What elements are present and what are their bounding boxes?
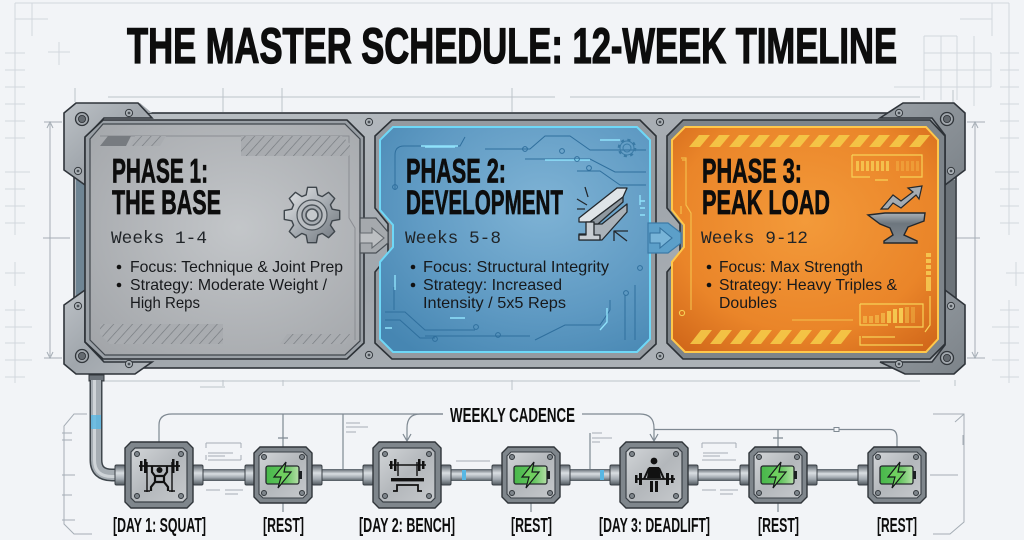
- bullet list phase 3: Focus: Max Strength: [719, 259, 863, 276]
- label: rest 2: [REST]: [511, 515, 552, 537]
- bullet list phase 3: [707, 259, 897, 312]
- label: day 3 deadlift: [DAY 3: DEADLIFT]: [599, 515, 710, 537]
- label: rest 3: [REST]: [758, 515, 799, 537]
- icon: rising arrow: [881, 186, 922, 209]
- corner bracket bottom-right: [880, 290, 965, 374]
- node: rest 4: [868, 447, 926, 503]
- node: day 1 squat: [125, 442, 193, 508]
- heading: phase 1: PHASE 1:: [112, 152, 208, 190]
- node: day 2 bench: [373, 442, 441, 508]
- bullet list phase 1: Focus: Technique & Joint Prep: [130, 259, 343, 276]
- corner bracket top-left: [64, 103, 152, 185]
- weeks 1-4: Weeks 1-4: [111, 229, 207, 249]
- icon: bench: [389, 459, 426, 491]
- weeks 5-8: Weeks 5-8: [405, 229, 501, 249]
- bullet list phase 2: [411, 259, 609, 312]
- heading: phase 2: DEVELOPMENT: [406, 184, 563, 222]
- icon: anvil: [868, 213, 925, 243]
- panel deco: circuit left: [681, 158, 691, 310]
- hazard stripes bottom: [690, 330, 852, 344]
- panel deco: bars top: [852, 155, 922, 180]
- label: rest 1: [REST]: [263, 515, 304, 537]
- hazard stripes top: [689, 135, 930, 147]
- bullet list phase 3: Strategy: Heavy Triples &: [719, 277, 897, 294]
- node: day 3 deadlift: [620, 442, 688, 508]
- hatch small: [280, 334, 350, 344]
- label: day 1 squat: [DAY 1: SQUAT]: [113, 515, 206, 537]
- dark tab top left: [100, 136, 131, 146]
- frame bolts: [74, 109, 955, 368]
- heading: phase 1: THE BASE: [112, 184, 221, 222]
- heading: phase 3: PHASE 3:: [702, 152, 802, 190]
- metal frame: [64, 103, 965, 374]
- heading: phase 3: [702, 152, 830, 222]
- bullet list phase 1: [117, 259, 343, 312]
- label: day 2 bench: [DAY 2: BENCH]: [359, 515, 455, 537]
- circuit traces: [385, 136, 646, 341]
- heading: phase 2: [406, 152, 563, 222]
- bullet list phase 2: Strategy: Increased: [423, 277, 562, 294]
- bullet list phase 3: Doubles: [719, 295, 777, 312]
- corner bracket bottom-left: [64, 290, 152, 374]
- wiring lines: [159, 414, 897, 512]
- icon: squat: [139, 459, 180, 492]
- connector tab and arrow 1 to 2: [360, 218, 388, 253]
- icon: steel beam: [577, 187, 628, 241]
- panel deco: bars bottom: [792, 253, 931, 345]
- bullet list phase 1: High Reps: [130, 295, 200, 312]
- heading: weekly cadence: WEEKLY CADENCE: [450, 405, 575, 427]
- corner bracket top-right: [880, 103, 965, 185]
- node: rest 2: [502, 447, 560, 503]
- heading: phase 3: PEAK LOAD: [702, 184, 830, 222]
- node: rest 1: [254, 447, 312, 503]
- blueprint background lines: [5, 3, 1024, 390]
- icon: deadlift: [635, 458, 675, 492]
- heading: phase 2: PHASE 2:: [406, 152, 506, 190]
- feed pipe: [89, 375, 122, 476]
- connector tab and arrow 2 to 3: [648, 223, 681, 253]
- bullet list phase 1: Strategy: Moderate Weight /: [130, 277, 328, 294]
- bracket right: [930, 414, 964, 534]
- hatch bottom left: [100, 324, 223, 344]
- icon: small gear: [619, 140, 635, 156]
- node: rest 3: [749, 447, 807, 503]
- panel: phase 3 peak load: [667, 120, 945, 359]
- dimension line left: [43, 122, 70, 358]
- hatch top right: [241, 136, 350, 156]
- weeks 9-12: Weeks 9-12: [701, 229, 808, 249]
- pipeline: [115, 465, 873, 485]
- bullet list phase 2: Focus: Structural Integrity: [423, 259, 609, 276]
- panel: phase 1 the base: [85, 120, 364, 359]
- heading: phase 1: [112, 152, 221, 222]
- dimension line right: [955, 122, 985, 358]
- bullet list phase 2: Intensity / 5x5 Reps: [423, 295, 566, 312]
- label: rest 4: [REST]: [877, 515, 917, 537]
- icon: gear: [284, 187, 340, 243]
- bracket left: [62, 414, 92, 534]
- small annotation marks: [206, 423, 738, 494]
- panel: phase 2 development: [375, 120, 656, 359]
